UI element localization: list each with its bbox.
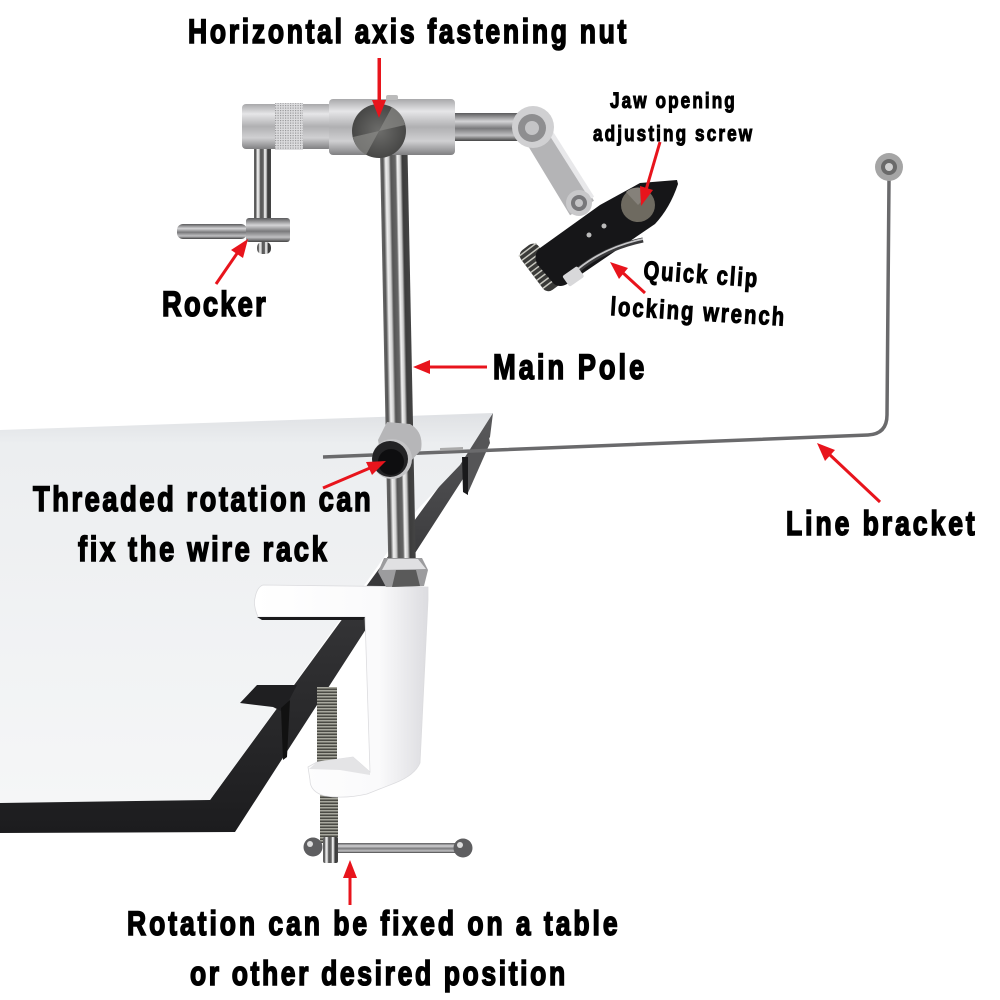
label: jaw opening adjusting screw — [593, 89, 753, 147]
jaw — [517, 180, 678, 294]
black rotation knob — [372, 439, 412, 479]
arrow: rotation clamp — [343, 860, 357, 905]
line bracket rod — [323, 153, 903, 457]
label: jaw opening adjusting screw: Jaw opening — [610, 89, 735, 114]
arm and jaw link — [452, 106, 592, 216]
label: quick clip locking wrench — [610, 256, 785, 331]
label: threaded rotation: fix the wire rack — [78, 530, 327, 569]
red arrows — [216, 58, 880, 905]
clamp T handle — [304, 837, 472, 863]
label: rocker: Rocker — [162, 285, 266, 324]
arrow: jaw screw — [640, 142, 660, 206]
label: rotation fixed on a table: or other desired position — [190, 955, 565, 993]
label: main pole: Main Pole — [493, 348, 644, 387]
arrow: line bracket — [817, 443, 880, 502]
label: quick clip locking wrench: locking wrench — [610, 292, 785, 331]
label: rotation fixed on a table: Rotation can be fixed on a table — [127, 905, 618, 943]
white clamp — [254, 585, 428, 797]
label: rotation fixed on a table — [127, 905, 618, 993]
label: line bracket: Line bracket — [786, 505, 975, 543]
main pole — [378, 150, 428, 587]
label: threaded rotation: Threaded rotation can — [33, 480, 371, 519]
rocker handle — [177, 149, 290, 254]
label: jaw opening adjusting screw: adjusting screw — [593, 122, 753, 147]
label: horizontal axis fastening nut: Horizontal axis fastening nut — [188, 13, 626, 51]
label: quick clip locking wrench: Quick clip — [643, 256, 758, 293]
head cylinder — [242, 95, 455, 158]
label: threaded rotation — [33, 480, 371, 569]
arrow: quick clip wrench — [610, 262, 645, 293]
arrow: rocker — [216, 239, 248, 284]
arrow: main pole — [413, 360, 487, 374]
table — [0, 413, 493, 833]
arrow: threaded rotation — [323, 461, 386, 488]
arrow: horizontal axis nut — [372, 58, 386, 118]
clamp screw — [317, 687, 338, 843]
